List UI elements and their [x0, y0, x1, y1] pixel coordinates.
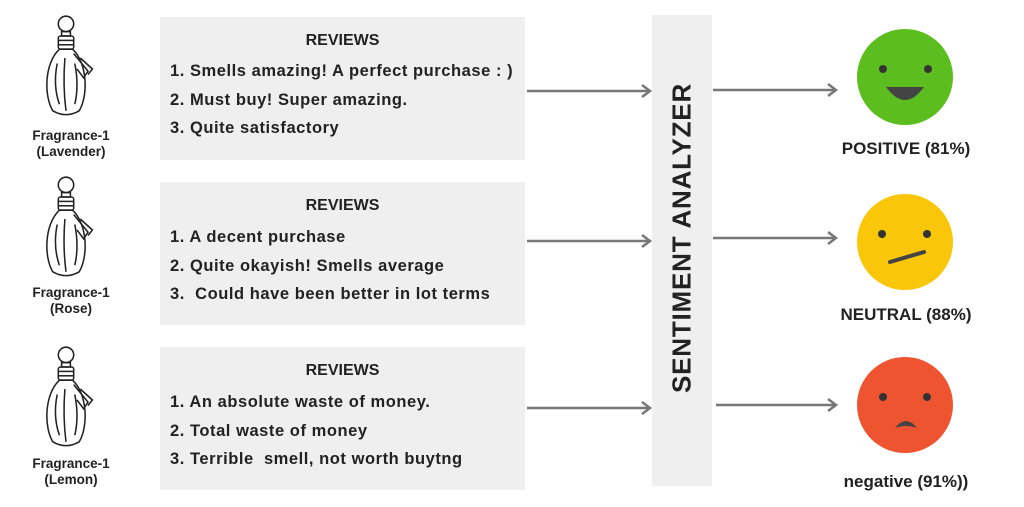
label: rose: [32, 285, 110, 316]
arrow 2: [527, 235, 650, 247]
arrow 6: [716, 399, 836, 411]
icon: negative face: [857, 357, 953, 453]
result: neutral: NEUTRAL (88%): [840, 305, 971, 324]
panel: reviews lavender: [160, 17, 525, 160]
label: lemon: (Lemon): [44, 472, 98, 487]
label: lemon: Fragrance-1: [32, 456, 110, 471]
label: lavender: (Lavender): [36, 144, 106, 159]
panel: reviews rose: 2. Quite okayish! Smells average: [170, 257, 444, 275]
panel: reviews rose: REVIEWS: [306, 197, 379, 214]
panel: reviews lavender: REVIEWS: [306, 32, 379, 49]
arrow 4: [713, 84, 836, 96]
panel: reviews lavender: 1. Smells amazing! A perfect purchase : ): [170, 62, 513, 80]
label: rose: (Rose): [50, 301, 92, 316]
panel: sentiment analyzer: SENTIMENT ANALYZER: [666, 83, 696, 393]
panel: reviews rose: [160, 182, 525, 325]
icon: bottle rose: [47, 177, 92, 276]
panel: reviews lemon: 2. Total waste of money: [170, 422, 368, 440]
result: negative: negative (91%)): [844, 472, 968, 491]
arrow 1: [527, 85, 650, 97]
panel: reviews lemon: REVIEWS: [306, 362, 379, 379]
panel: reviews lavender: 3. Quite satisfactory: [170, 119, 339, 137]
panel: reviews lemon: 1. An absolute waste of money.: [170, 393, 430, 411]
label: lavender: Fragrance-1: [32, 128, 110, 143]
label: lemon: [32, 456, 110, 487]
label: lavender: [32, 128, 110, 159]
panel: reviews rose: 1. A decent purchase: [170, 228, 346, 246]
icon: bottle lavender: [47, 16, 92, 115]
icon: positive face: [857, 29, 953, 125]
panel: reviews lavender: 2. Must buy! Super amazing.: [170, 91, 408, 109]
label: rose: Fragrance-1: [32, 285, 110, 300]
panel: sentiment analyzer: [652, 15, 712, 486]
icon: neutral face: [857, 194, 953, 290]
arrow 3: [527, 402, 650, 414]
panel: reviews lemon: [160, 347, 525, 490]
icon: bottle lemon: [47, 347, 92, 446]
result: positive: POSITIVE (81%): [842, 139, 970, 158]
panel: reviews lemon: 3. Terrible smell, not worth buytng: [170, 450, 463, 468]
arrow 5: [713, 232, 836, 244]
panel: reviews rose: 3. Could have been better in lot terms: [170, 285, 490, 303]
